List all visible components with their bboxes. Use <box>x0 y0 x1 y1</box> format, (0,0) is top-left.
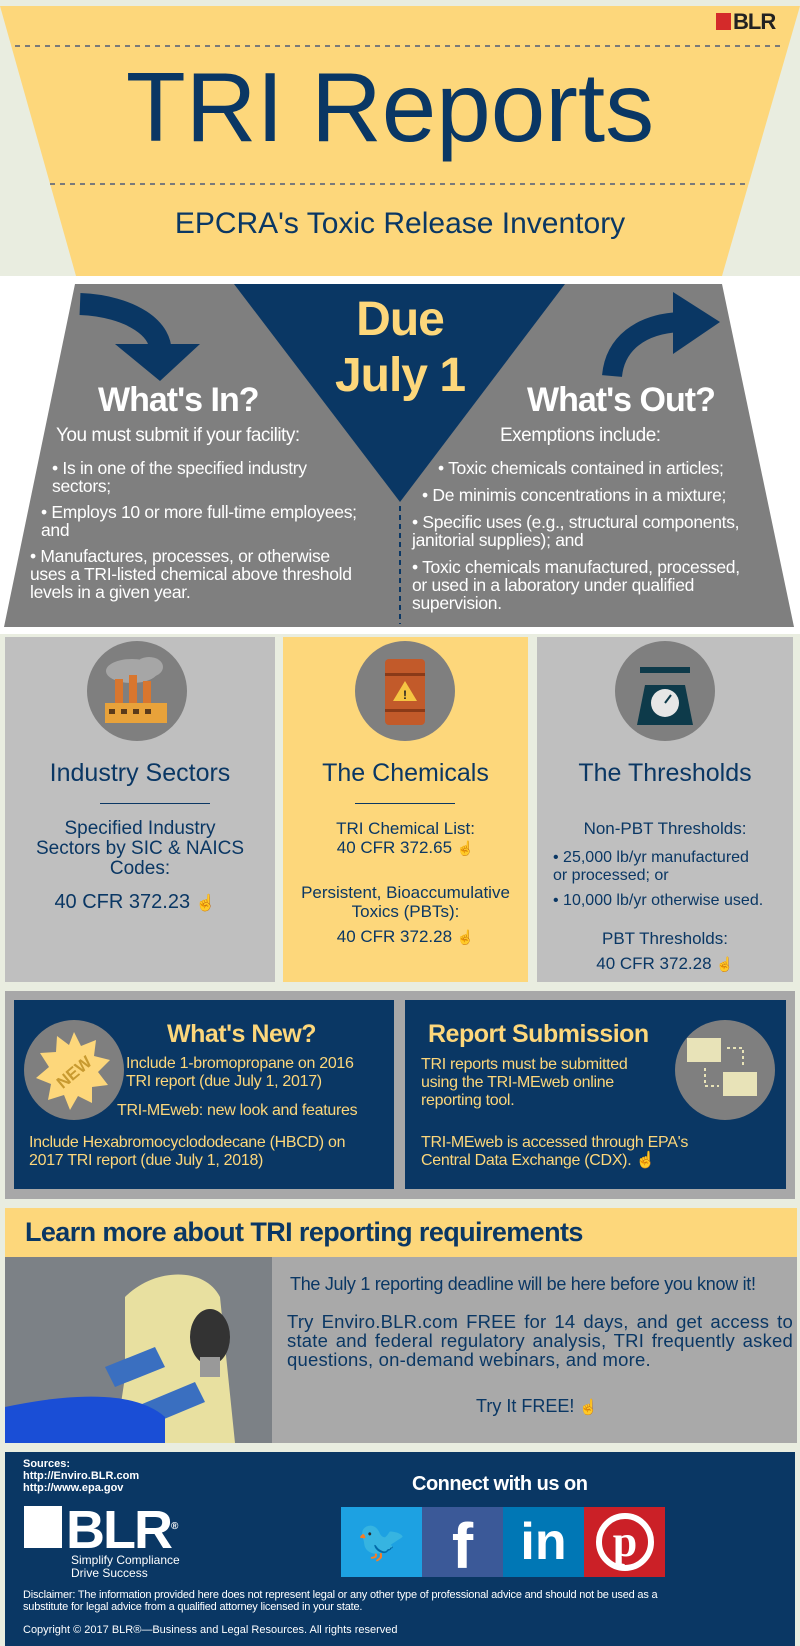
disclaimer: substitute for legal advice from a qualified attorney licensed in your state. <box>23 1601 362 1613</box>
heading <box>5 1208 797 1257</box>
panel: what's in / out: • Toxic chemicals contained in articles; <box>438 458 724 478</box>
panel: what's in / out: • Employs 10 or more full-time employees; <box>41 502 357 522</box>
sources: http://www.epa.gov <box>23 1482 123 1494</box>
panel: thresholds: • 10,000 lb/yr otherwise used. <box>553 892 763 909</box>
text: 40 CFR 372.65 ☝ <box>337 838 474 857</box>
panel: what's in / out: levels in a given year. <box>30 582 190 602</box>
panel: what's in / out <box>4 284 794 627</box>
panel: report submission: Report Submission <box>428 1020 649 1048</box>
panel: thresholds: or processed; or <box>553 867 669 884</box>
subtitle: EPCRA's Toxic Release Inventory <box>175 207 625 240</box>
social icons: p <box>613 1517 637 1566</box>
panel: what's in / out: • De minimis concentrations in a mixture; <box>422 485 726 505</box>
header band <box>0 6 800 276</box>
footer: Drive Success <box>71 1566 148 1580</box>
panel: what's in / out: • Toxic chemicals manufactured, processed, <box>412 557 740 577</box>
text: The July 1 reporting deadline will be here before you know it! <box>290 1274 756 1294</box>
panel: thresholds: • 25,000 lb/yr manufactured <box>553 849 749 866</box>
footer <box>5 1452 795 1646</box>
sources: Sources: <box>23 1458 70 1470</box>
panel: report submission <box>405 1000 786 1189</box>
icon: barrel <box>355 641 455 741</box>
logo: BLR: BLR® <box>66 1500 176 1560</box>
panel: learn more <box>5 1208 797 1443</box>
due date: July 1 <box>335 349 465 402</box>
text: TRI Chemical List: <box>336 819 475 838</box>
white band <box>0 276 800 634</box>
what's out: What's Out? <box>527 381 715 419</box>
icon: computers <box>675 1020 775 1120</box>
panel: what's new: What's New? <box>167 1020 316 1048</box>
panel: chemicals: 40 CFR 372.28 ☝ <box>337 927 474 946</box>
social icons: 🐦 <box>357 1519 406 1565</box>
panel: report submission: TRI reports must be submitted <box>421 1056 628 1073</box>
disclaimer: Disclaimer: The information provided here does not represent legal or any other type of professional advice and should not be used as a <box>23 1589 657 1601</box>
panel: chemicals: Persistent, Bioaccumulative <box>301 883 510 902</box>
sources <box>23 1458 139 1494</box>
icon: factory <box>87 641 187 741</box>
title: TRI Reports <box>126 52 654 162</box>
panel: what's new <box>14 1000 394 1189</box>
panel: what's new: 2017 TRI report (due July 1, 2018) <box>29 1152 263 1169</box>
text <box>336 819 475 857</box>
panel: what's in / out: and <box>41 520 69 540</box>
heading: Industry Sectors <box>50 759 230 787</box>
panel: what's in / out: • Specific uses (e.g., structural components, <box>412 512 739 532</box>
panel: what's in / out: • Is in one of the specified industry <box>52 458 307 478</box>
disclaimer <box>23 1589 658 1613</box>
text: Non-PBT Thresholds: <box>584 819 746 838</box>
social icons: f <box>452 1510 473 1582</box>
copyright: Copyright © 2017 BLR®—Business and Legal Resources. All rights reserved <box>23 1624 398 1636</box>
panel: what's in / out: uses a TRI-listed chemical above threshold <box>30 564 352 584</box>
panel: report submission: Central Data Exchange (CDX). ☝ <box>421 1152 655 1169</box>
social icons <box>341 1507 665 1582</box>
icon: barrel: ! <box>403 688 407 702</box>
what's in: What's In? <box>98 381 259 419</box>
icon: new badge: NEW <box>53 1052 96 1092</box>
panel: learn more: Try Enviro.BLR.com FREE for 14 days, and get access to state and federal regulatory analysis, TRI frequently asked questions, on-demand webinars, and more. <box>287 1311 793 1370</box>
panel: what's in / out: • Manufactures, processes, or otherwise <box>30 546 330 566</box>
text: Sectors by SIC & NAICS <box>36 838 244 859</box>
panel: report submission: using the TRI-MEweb online <box>421 1074 614 1091</box>
text <box>36 818 244 879</box>
panel: news band <box>5 991 795 1199</box>
panel: report submission: TRI-MEweb is accessed through EPA's <box>421 1134 688 1151</box>
icon: new badge <box>24 1020 124 1120</box>
social icons: in <box>520 1513 567 1571</box>
heading: The Chemicals <box>322 759 489 787</box>
panel: thresholds: PBT Thresholds: <box>602 929 728 948</box>
text: Specified Industry <box>64 818 216 839</box>
panel: what's in / out: janitorial supplies); and <box>412 530 584 550</box>
panel: what's in / out: sectors; <box>52 476 111 496</box>
due date: Due <box>356 293 444 346</box>
logo: BLR: BLR <box>733 9 775 34</box>
footer: Simplify Compliance <box>71 1553 180 1567</box>
heading: The Thresholds <box>578 759 752 787</box>
panel: what's new: Include Hexabromocyclododecane (HBCD) on <box>29 1134 345 1151</box>
panel: what's in / out: Exemptions include: <box>500 425 661 446</box>
panel: industry sectors: 40 CFR 372.23 ☝ <box>54 891 216 913</box>
panel: what's new: Include 1-bromopropane on 2016 <box>126 1055 354 1072</box>
icon: scale <box>615 641 715 741</box>
panel: industry sectors <box>5 637 275 982</box>
panel: what's in / out: You must submit if your facility: <box>56 425 300 446</box>
panel: what's new: TRI-MEweb: new look and features <box>117 1102 357 1119</box>
panel: thresholds <box>537 637 793 982</box>
panel: what's in / out: supervision. <box>412 593 502 613</box>
panel: report submission: reporting tool. <box>421 1092 514 1109</box>
panel: learn more: Try It FREE! ☝ <box>476 1396 598 1416</box>
photo: hazmat worker <box>5 1257 272 1443</box>
panel: chemicals <box>283 637 528 982</box>
connect heading: Connect with us on <box>412 1473 587 1495</box>
panel: chemicals: Toxics (PBTs): <box>352 902 459 921</box>
panel: what's new: TRI report (due July 1, 2017) <box>126 1073 322 1090</box>
due date <box>335 293 465 402</box>
panel: thresholds: 40 CFR 372.28 ☝ <box>596 954 734 973</box>
sources: http://Enviro.BLR.com <box>23 1470 139 1482</box>
panel: learn more: Learn more about TRI reporting requirements <box>25 1217 583 1247</box>
text: Codes: <box>110 858 170 879</box>
panel: what's in / out: or used in a laboratory under qualified <box>412 575 694 595</box>
